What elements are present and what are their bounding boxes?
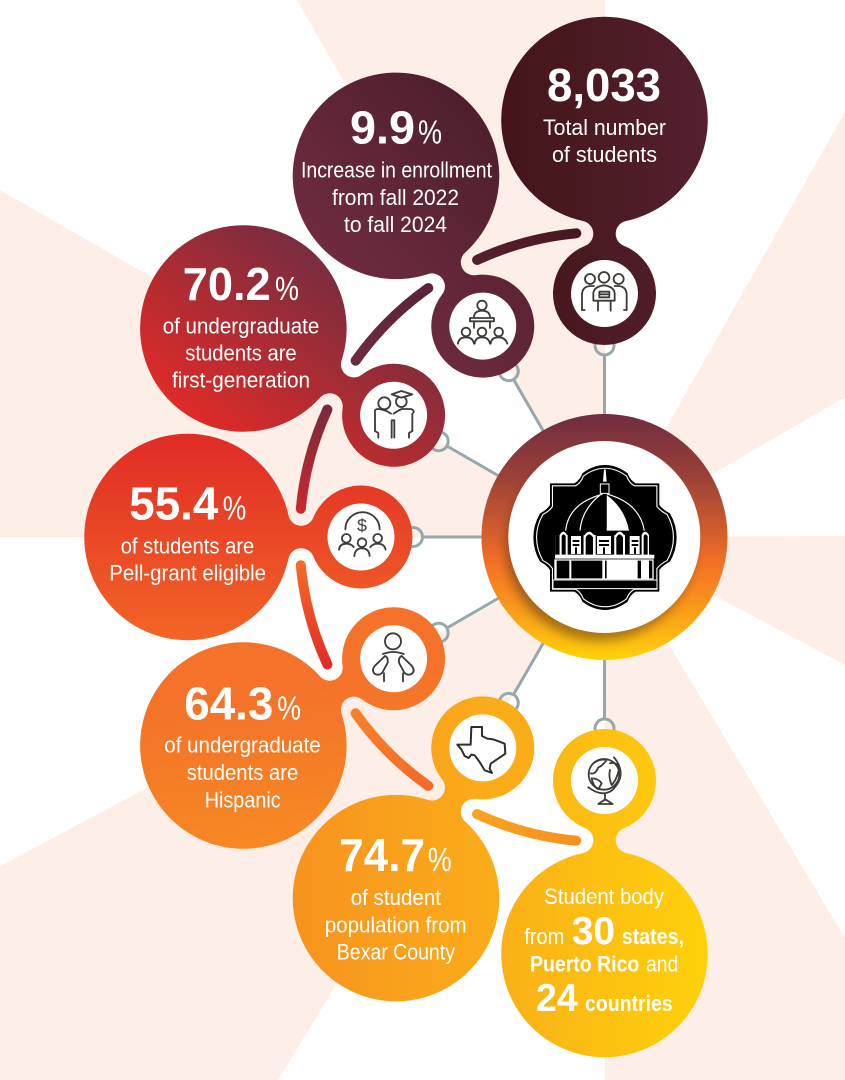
stat: 74.7 percent: % <box>428 841 452 878</box>
description: states, Puerto Rico and countries: 24 <box>536 977 578 1020</box>
icon: student with backpack <box>373 633 414 681</box>
description: Pell-grant eligible: of students are <box>121 533 254 558</box>
central hub with seal <box>482 414 728 660</box>
description: Bexar County: population from <box>325 912 467 937</box>
panel: student body origins <box>501 729 708 1057</box>
description: increase in enrollment: from fall 2022 <box>332 185 459 210</box>
stat: 70.2 percent: 70.2 <box>183 258 271 310</box>
panel: Hispanic undergraduates <box>102 544 490 887</box>
stat: 64.3 percent: 64.3 <box>184 677 273 729</box>
description: total number of students: of students <box>552 142 657 167</box>
description: Pell-grant eligible: Pell-grant eligible <box>109 561 266 586</box>
icon: graduate with parent <box>375 391 414 438</box>
description: increase in enrollment: Increase in enrollment <box>301 158 492 183</box>
icon: domed building seal <box>533 465 677 610</box>
description: states, Puerto Rico and countries: from <box>524 924 564 949</box>
icon: Texas outline <box>457 727 505 773</box>
connector lines from hub to icons <box>404 336 614 738</box>
stat: 55.4 percent: % <box>223 489 246 526</box>
curved arrows between bubbles <box>301 233 576 841</box>
stat: 9.9 percent <box>350 102 442 154</box>
description: states, Puerto Rico and countries: and <box>646 952 678 977</box>
icon: people with dollar sign <box>339 512 386 556</box>
stat: 8,033: 8,033 <box>547 59 661 111</box>
stat: 9.9 percent: 9.9 <box>350 102 415 154</box>
description: increase in enrollment: to fall 2024 <box>344 212 447 237</box>
icon: teacher at podium <box>458 301 507 344</box>
stat: 70.2 percent: % <box>275 270 299 307</box>
description: states, Puerto Rico and countries: Puerto Rico <box>530 952 639 977</box>
panel: Bexar County <box>255 652 598 1039</box>
description: Hispanic: Hispanic <box>205 787 281 812</box>
description: Hispanic: of undergraduate <box>164 733 321 758</box>
description: states, Puerto Rico and countries: countries <box>585 991 673 1016</box>
panel: first-generation students <box>102 187 490 530</box>
icon: people with dollar sign: $ <box>357 516 367 536</box>
stat: 9.9 percent: % <box>418 114 442 150</box>
description: states, Puerto Rico and countries <box>524 884 684 1020</box>
description: Bexar County: of student <box>351 885 441 910</box>
description: Bexar County: Bexar County <box>337 939 455 964</box>
panel: increase in enrollment <box>255 35 598 422</box>
stat: 74.7 percent: 74.7 <box>339 829 425 881</box>
icon: globe <box>588 757 621 804</box>
panel: Pell-grant eligible <box>84 434 412 640</box>
description: states, Puerto Rico and countries: Student body <box>544 884 664 909</box>
description: total number of students: Total number <box>543 115 666 140</box>
description: states, Puerto Rico and countries: states, <box>622 924 684 949</box>
description: states, Puerto Rico and countries: 30 <box>572 910 615 953</box>
description: first-generation: first-generation <box>172 368 310 393</box>
stat: 64.3 percent: % <box>277 689 301 726</box>
icon: group of students <box>582 272 627 311</box>
stat: 55.4 percent: 55.4 <box>129 477 219 529</box>
panel: total number of students <box>501 17 708 345</box>
description: first-generation: students are <box>185 341 297 366</box>
description: first-generation: of undergraduate <box>163 313 319 338</box>
description: Hispanic: students are <box>187 760 298 785</box>
